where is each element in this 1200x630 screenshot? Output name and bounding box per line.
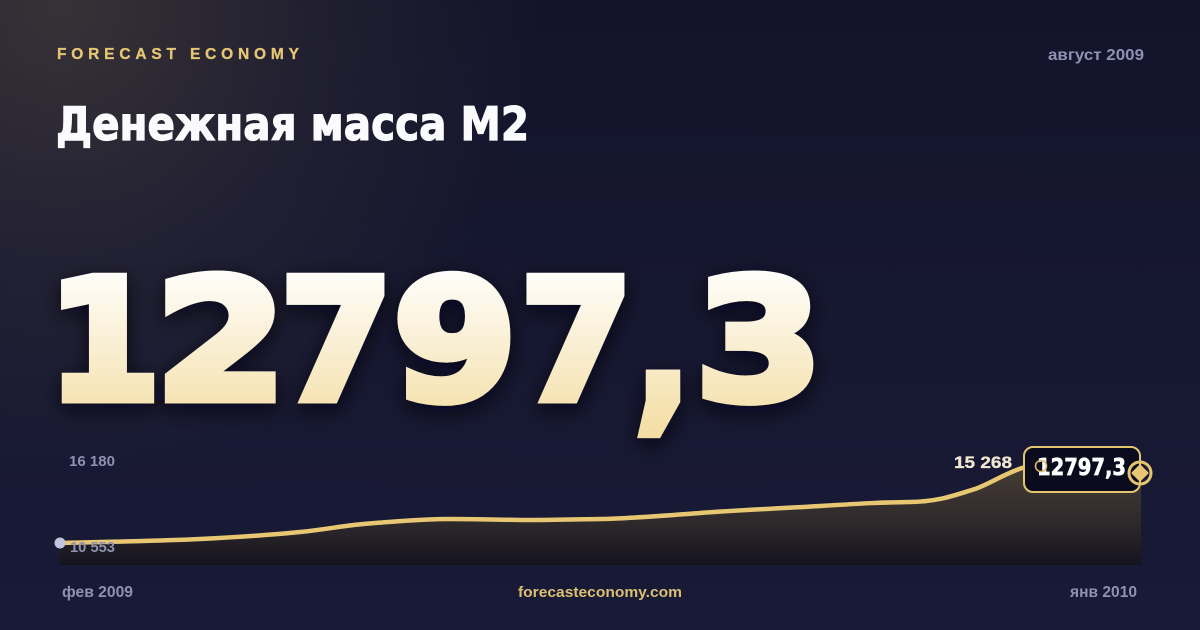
current value callout (1024, 447, 1140, 492)
main value: 7 (280, 245, 393, 439)
current marker (1129, 462, 1151, 484)
title: Денежная масса М2 (56, 97, 529, 151)
area fill (60, 464, 1141, 565)
axis max: 16 180 (69, 453, 115, 470)
end date: янв 2010 (1069, 584, 1137, 601)
website: forecasteconomy.com (518, 584, 682, 601)
current value callout: 12797,3 (1037, 455, 1126, 481)
main value: 1 (47, 245, 161, 439)
peak label: 15 268 (954, 453, 1012, 472)
main value: 7 (520, 245, 633, 439)
main value (47, 242, 823, 451)
peak marker (1036, 460, 1046, 472)
main value: 3 (695, 245, 823, 439)
line (60, 467, 1025, 543)
start date: фев 2009 (62, 584, 133, 601)
area chart (54, 464, 1141, 565)
main value: , (634, 242, 692, 451)
brand label: FORECAST ECONOMY (57, 46, 300, 63)
main value: 9 (393, 245, 517, 439)
date: август 2009 (1048, 47, 1144, 64)
main value: 2 (155, 245, 287, 439)
axis min: 10 553 (70, 539, 115, 556)
start dot (54, 538, 66, 548)
